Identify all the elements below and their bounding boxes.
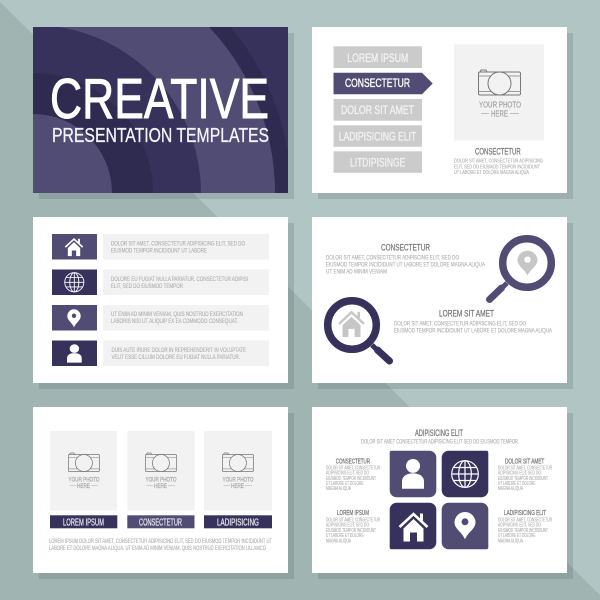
photo card 3 <box>204 431 272 510</box>
photo placeholder <box>454 44 544 140</box>
text block: lorem ipsum: LOREM IPSUM <box>337 508 369 517</box>
text block: dolor sit amet: MAGNA ALIQUA <box>498 486 523 492</box>
paragraph: LABORE ET DOLORE MAGNA ALIQUA. UT ENIM AD MINIM VENIAM, QUIS NOSTRUD EXERCITATION ULLAMCO <box>49 546 266 552</box>
text block: consectetur: CONSECTETUR <box>381 242 430 252</box>
icon: magnifier with pin <box>490 239 551 300</box>
panel: menu with photo <box>312 27 573 199</box>
caption: ELIT, SED DO EIUSMOD TEMPOR INCIDIDUNT <box>454 164 540 170</box>
menu item: active consectetur arrow <box>334 73 433 94</box>
text block: dolor sit amet: EIUSMOD TEMPOR INCIDIDUNT <box>498 476 548 482</box>
paragraph: LOREM IPSUM DOLOR SIT AMET, CONSECTETUR ADIPISICING ELIT, SED DO EIUSMOD TEMPOR INCIDIDUNT UT <box>49 539 272 545</box>
row: person: DUIS AUTE IRURE DOLOR IN REPREHENDERIT IN VOLUPTATE <box>112 348 246 354</box>
text block: dolor sit amet: ADIPISICING ELIT, SED DO <box>498 470 541 476</box>
text block: lorem sit amet: EIUSMOD TEMPOR INCIDIDUNT UT LABORE ET DOLORE MAGNA ALIQUA <box>394 328 552 334</box>
caption: CONSECTETUR <box>475 146 521 156</box>
row: pin: LABORIS NISI UT ALIQUIP EX EA COMMODO CONSEQUAT. <box>111 319 238 325</box>
heading: DOLOR SIT AMET CONSECTETUR ADIPISICING ELIT SED DO EIUSMOD TEMPOR <box>361 440 518 446</box>
text block: consectetur: CONSECTETUR <box>336 457 370 466</box>
tile: globe <box>442 451 488 497</box>
text block: lorem ipsum: ADIPISICING ELIT, SED DO <box>326 523 369 529</box>
photo card 3: HERE <box>231 483 244 490</box>
text block: lorem ipsum: UT LABORE ET DOLORE <box>326 533 364 539</box>
row: home: EIUSMOD TEMPOR INCIDIDUNT UT LABORE <box>111 248 207 254</box>
label: lorem ipsum <box>50 515 117 528</box>
row: globe: DOLORE EU FUGIAT NULLA PARIATUR, CONSECTETUR ADIPISI <box>111 277 248 283</box>
panel: four tiles <box>312 407 573 579</box>
label: consectetur: CONSECTETUR <box>139 518 182 528</box>
text block: consectetur: DOLOR SIT AMET, CONSECTETUR ADIPISCING ELIT, SED DO <box>326 256 459 262</box>
text block: consectetur: MAGNA ALIQUA <box>326 486 351 492</box>
panel: three photos <box>33 407 294 579</box>
photo card 2: YOUR PHOTO <box>146 476 176 484</box>
text block: dolor sit amet: UT LABORE ET DOLORE <box>498 481 536 487</box>
menu item: active consectetur arrow: CONSECTETUR <box>345 78 410 90</box>
row: home: DOLOR SIT AMET, CONSECTETUR ADIPISICING ELIT, SED DO <box>111 242 245 248</box>
text block: lorem ipsum: MAGNA ALIQUA <box>326 538 351 544</box>
row: person: VELIT ESSE CILLUM DOLORE EU FUGIAT NULLA PARIATUR. <box>112 355 240 361</box>
text block: ladipisicing elit: DOLOR SIT AMET, CONSECTETUR <box>498 518 552 524</box>
text block: consectetur <box>326 242 485 276</box>
text block: ladipisicing elit: LADIPISICING ELIT <box>504 508 546 517</box>
text block: dolor sit amet: DOLOR SIT AMET, CONSECTETUR <box>498 466 552 472</box>
text block: consectetur <box>326 457 380 492</box>
panel: title slide <box>0 0 294 451</box>
menu item: dolor sit amet: DOLOR SIT AMET <box>341 105 414 117</box>
caption <box>454 146 543 176</box>
photo card 2: HERE <box>154 483 167 490</box>
menu item: ladipisicing elit <box>334 125 422 147</box>
text block: consectetur: ADIPISICING ELIT, SED DO <box>326 470 369 476</box>
heading: ADIPISICING ELIT <box>415 428 463 438</box>
text block: consectetur: DOLOR SIT AMET, CONSECTETUR <box>326 466 380 472</box>
menu item: lorem ipsum: LOREM IPSUM <box>347 53 408 65</box>
photo card 1 <box>50 431 117 510</box>
text block: ladipisicing elit <box>498 508 552 544</box>
label: consectetur <box>127 515 194 528</box>
menu item: ladipisicing elit: LADIPISICING ELIT <box>339 131 416 143</box>
label: lorem ipsum: LOREM IPSUM <box>63 518 104 528</box>
caption: UT LABORE ET DOLORE MAGNA ALIQUA <box>454 170 530 176</box>
tile: home <box>390 503 436 549</box>
tile: person <box>390 451 436 497</box>
text block: lorem sit amet: DOLOR SIT AMET, CONSECTETUR ADIPISCING ELIT, SED DO <box>394 322 526 328</box>
text block: lorem ipsum: EIUSMOD TEMPOR INCIDIDUNT <box>326 528 376 534</box>
text block: ladipisicing elit: ADIPISICING ELIT, SED DO <box>498 523 541 529</box>
photo placeholder: YOUR PHOTO <box>479 100 521 110</box>
row: home <box>52 234 269 260</box>
row: globe <box>52 270 269 295</box>
text block: lorem sit amet <box>394 308 552 334</box>
text block: consectetur: EIUSMOD TEMPOR INCIDIDUNT <box>326 476 376 482</box>
panel: icon list <box>33 217 294 389</box>
subtitle: PRESENTATION TEMPLATES <box>52 124 269 147</box>
text block: ladipisicing elit: UT LABORE ET DOLORE <box>498 533 536 539</box>
menu item: lorem ipsum <box>334 46 422 68</box>
heading <box>361 428 518 446</box>
text block: consectetur: UT LABORE ET DOLORE <box>326 481 364 487</box>
photo card 3: YOUR PHOTO <box>222 476 254 484</box>
text block: lorem ipsum: DOLOR SIT AMET, CONSECTETUR <box>326 518 380 524</box>
photo card 1: YOUR PHOTO <box>68 476 100 484</box>
text block: ladipisicing elit: EIUSMOD TEMPOR INCIDIDUNT <box>498 528 548 534</box>
menu item: litdipisinge <box>334 151 422 173</box>
text block: dolor sit amet: DOLOR SIT AMET <box>505 457 545 466</box>
photo card 1: HERE <box>77 483 90 490</box>
photo card 2 <box>127 431 194 510</box>
photo placeholder: HERE <box>491 110 508 118</box>
paragraph <box>49 539 272 552</box>
menu item: dolor sit amet <box>334 99 422 121</box>
icon: magnifier with home <box>328 301 390 361</box>
label: ladipisicing <box>204 515 272 528</box>
text block: consectetur: UT ENIM AD MINIM VENIAM <box>326 270 387 276</box>
tile: pin <box>442 503 488 549</box>
text block: lorem ipsum <box>326 508 380 544</box>
text block: lorem sit amet: LOREM SIT AMET <box>439 308 494 318</box>
icon: camera <box>478 70 521 95</box>
text block: ladipisicing elit: MAGNA ALIQUA <box>498 538 523 544</box>
panel: magnifiers <box>312 217 573 389</box>
row: person <box>52 340 269 366</box>
text block: consectetur: EIUSMOD TEMPOR INCIDIDUNT UT LABORE ET DOLORE MAGNA ALIQUA <box>326 262 485 268</box>
caption: DOLOR SIT AMET, CONSECTETUR ADIPISICING <box>454 159 543 165</box>
title: CREATIVE <box>50 67 269 131</box>
label: ladipisicing: LADIPISICING <box>217 518 259 528</box>
row: pin <box>52 305 269 330</box>
row: globe: ELIT, SED DO EIUSMOD TEMPOR <box>111 284 183 290</box>
text block: dolor sit amet <box>498 457 552 492</box>
row: pin: UT ENIM AD MINIM VENIAM, QUIS NOSTRUD EXERCITATION <box>111 312 243 318</box>
menu item: litdipisinge: LITDIPISINGE <box>350 158 406 170</box>
